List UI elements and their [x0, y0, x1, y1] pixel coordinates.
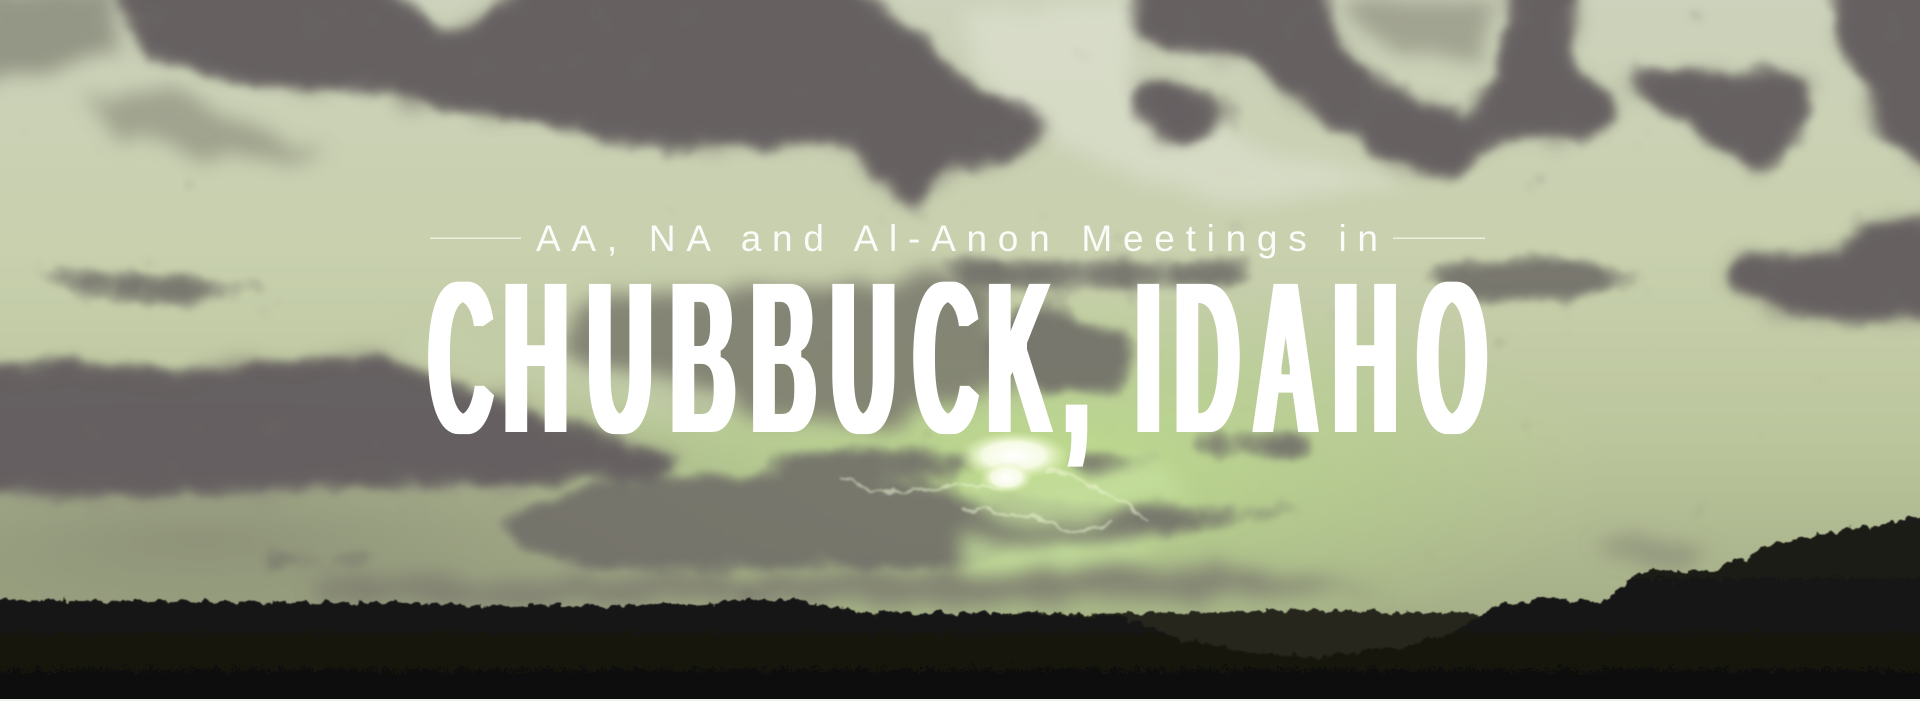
- subtitle rule left: [430, 238, 521, 239]
- cloud: lighter middle banks: [37, 262, 1647, 568]
- sun: [958, 431, 1070, 480]
- cloud: pale sunlit patches: [955, 471, 1188, 569]
- subtitle rule right: [1393, 238, 1485, 239]
- cloud: dark masses: [0, 0, 1920, 495]
- treeline silhouette: [0, 515, 1920, 701]
- subtitle: AA, NA and Al-Anon Meetings in: [536, 218, 1378, 259]
- bottom edge strip: [0, 699, 1920, 701]
- title: CHUBBUCK, IDAHO: [429, 234, 1486, 484]
- background: left shading: [0, 370, 960, 701]
- sunlit cloud edges: [840, 470, 1150, 532]
- background: sun glow: [490, 280, 1610, 660]
- cloud: dark mass halos: [0, 0, 1920, 495]
- cloud: distant grey banks: [0, 0, 1714, 605]
- cloud: light patches: [955, 6, 1408, 208]
- sun core: [980, 462, 1033, 493]
- mid-distance hill: [1000, 610, 1500, 668]
- cloud: diagonal pale band: [410, 321, 735, 422]
